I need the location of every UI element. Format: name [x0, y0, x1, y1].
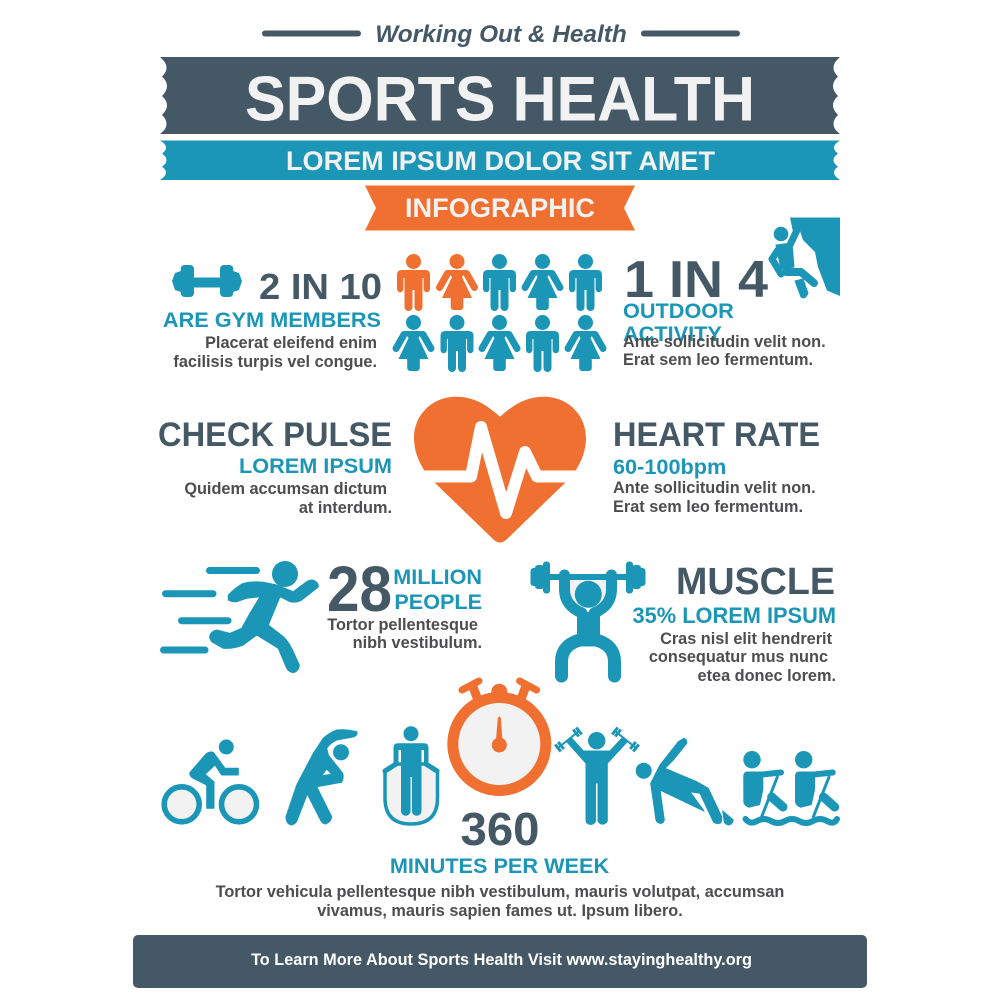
icon: jump rope — [385, 726, 438, 824]
icon: dumbbell — [172, 265, 242, 297]
stat text: 28 million people: 28 — [327, 553, 392, 625]
icon: stopwatch — [453, 681, 546, 790]
text: check pulse: at interdum. — [299, 499, 392, 517]
text: check pulse: LOREM IPSUM — [239, 453, 392, 478]
text: muscle: MUSCLE — [676, 561, 835, 603]
stat text: 28 million people: Tortor pellentesque — [327, 616, 478, 634]
stat text: 28 million people — [327, 553, 482, 652]
text: heart rate: HEART RATE — [613, 416, 820, 454]
text: muscle: consequatur mus nunc — [649, 648, 828, 666]
icon: heart with pulse — [405, 397, 600, 542]
text: check pulse: CHECK PULSE — [158, 416, 392, 454]
pictogram: ten people — [396, 254, 603, 372]
icon: cyclist — [164, 740, 256, 822]
stat text: 1 in 4 outdoor activity: OUTDOOR — [623, 298, 734, 323]
text: muscle — [633, 561, 836, 685]
footer bar — [133, 935, 867, 988]
stat text: 1 in 4 outdoor activity: 1 IN 4 — [624, 251, 768, 309]
stat text: 2 in 10 gym members: 2 IN 10 — [259, 266, 382, 307]
stat text: 2 in 10 gym members: ARE GYM MEMBERS — [163, 307, 381, 332]
stat text: 1 in 4 outdoor activity — [623, 251, 826, 369]
subtitle: working out and health — [262, 21, 740, 48]
banner: lorem ipsum subtitle — [160, 140, 840, 180]
text: heart rate: 60-100bpm — [613, 454, 726, 479]
ribbon: infographic — [365, 186, 635, 230]
stat: 360 minutes per week — [216, 803, 784, 920]
icon: dumbbell lifter — [555, 728, 639, 824]
text: heart rate — [613, 416, 820, 516]
stat text: 2 in 10 gym members: facilisis turpis vel congue. — [173, 353, 377, 371]
icon: rowers — [743, 751, 837, 823]
stat text: 28 million people: MILLION — [393, 564, 482, 589]
subtitle: working out and health: Working Out & Health — [375, 21, 627, 48]
stat text: 1 in 4 outdoor activity: Erat sem leo fermentum. — [623, 351, 813, 369]
text: heart rate: Ante sollicitudin velit non. — [613, 479, 816, 497]
text: heart rate: Erat sem leo fermentum. — [613, 498, 803, 516]
text: check pulse: Quidem accumsan dictum — [184, 480, 387, 498]
stat text: 1 in 4 outdoor activity: ACTIVITY — [623, 321, 722, 346]
text: muscle: 35% LOREM IPSUM — [633, 603, 836, 628]
stat: 360 minutes per week: MINUTES PER WEEK — [390, 853, 609, 878]
icon: side stretch — [286, 730, 357, 825]
stat: 360 minutes per week: Tortor vehicula pellentesque nibh vestibulum, mauris volutpat, accumsan — [216, 883, 784, 901]
stat text: 1 in 4 outdoor activity: Ante sollicitudin velit non. — [623, 333, 826, 351]
ribbon: infographic: INFOGRAPHIC — [405, 193, 595, 223]
text: muscle: etea donec lorem. — [698, 667, 836, 685]
banner: sports health: SPORTS HEALTH — [245, 64, 755, 134]
icon: rock climber — [772, 218, 840, 298]
stat: 360 minutes per week: 360 — [460, 803, 540, 855]
banner: lorem ipsum subtitle: LOREM IPSUM DOLOR SIT AMET — [286, 146, 716, 176]
stat text: 2 in 10 gym members: Placerat eleifend enim — [205, 334, 377, 352]
icon: side plank stretch — [636, 738, 733, 825]
text: check pulse — [158, 416, 392, 517]
footer bar: To Learn More About Sports Health Visit www.stayinghealthy.org — [251, 951, 752, 969]
icon: weightlifter — [530, 562, 646, 676]
text: muscle: Cras nisl elit hendrerit — [660, 630, 833, 648]
icon: runner — [164, 561, 318, 673]
stat: 360 minutes per week: vivamus, mauris sapien fames ut. Ipsum libero. — [317, 902, 683, 920]
stat text: 2 in 10 gym members — [163, 266, 382, 371]
stat text: 28 million people: nibh vestibulum. — [353, 634, 482, 652]
stat text: 28 million people: PEOPLE — [394, 589, 482, 614]
